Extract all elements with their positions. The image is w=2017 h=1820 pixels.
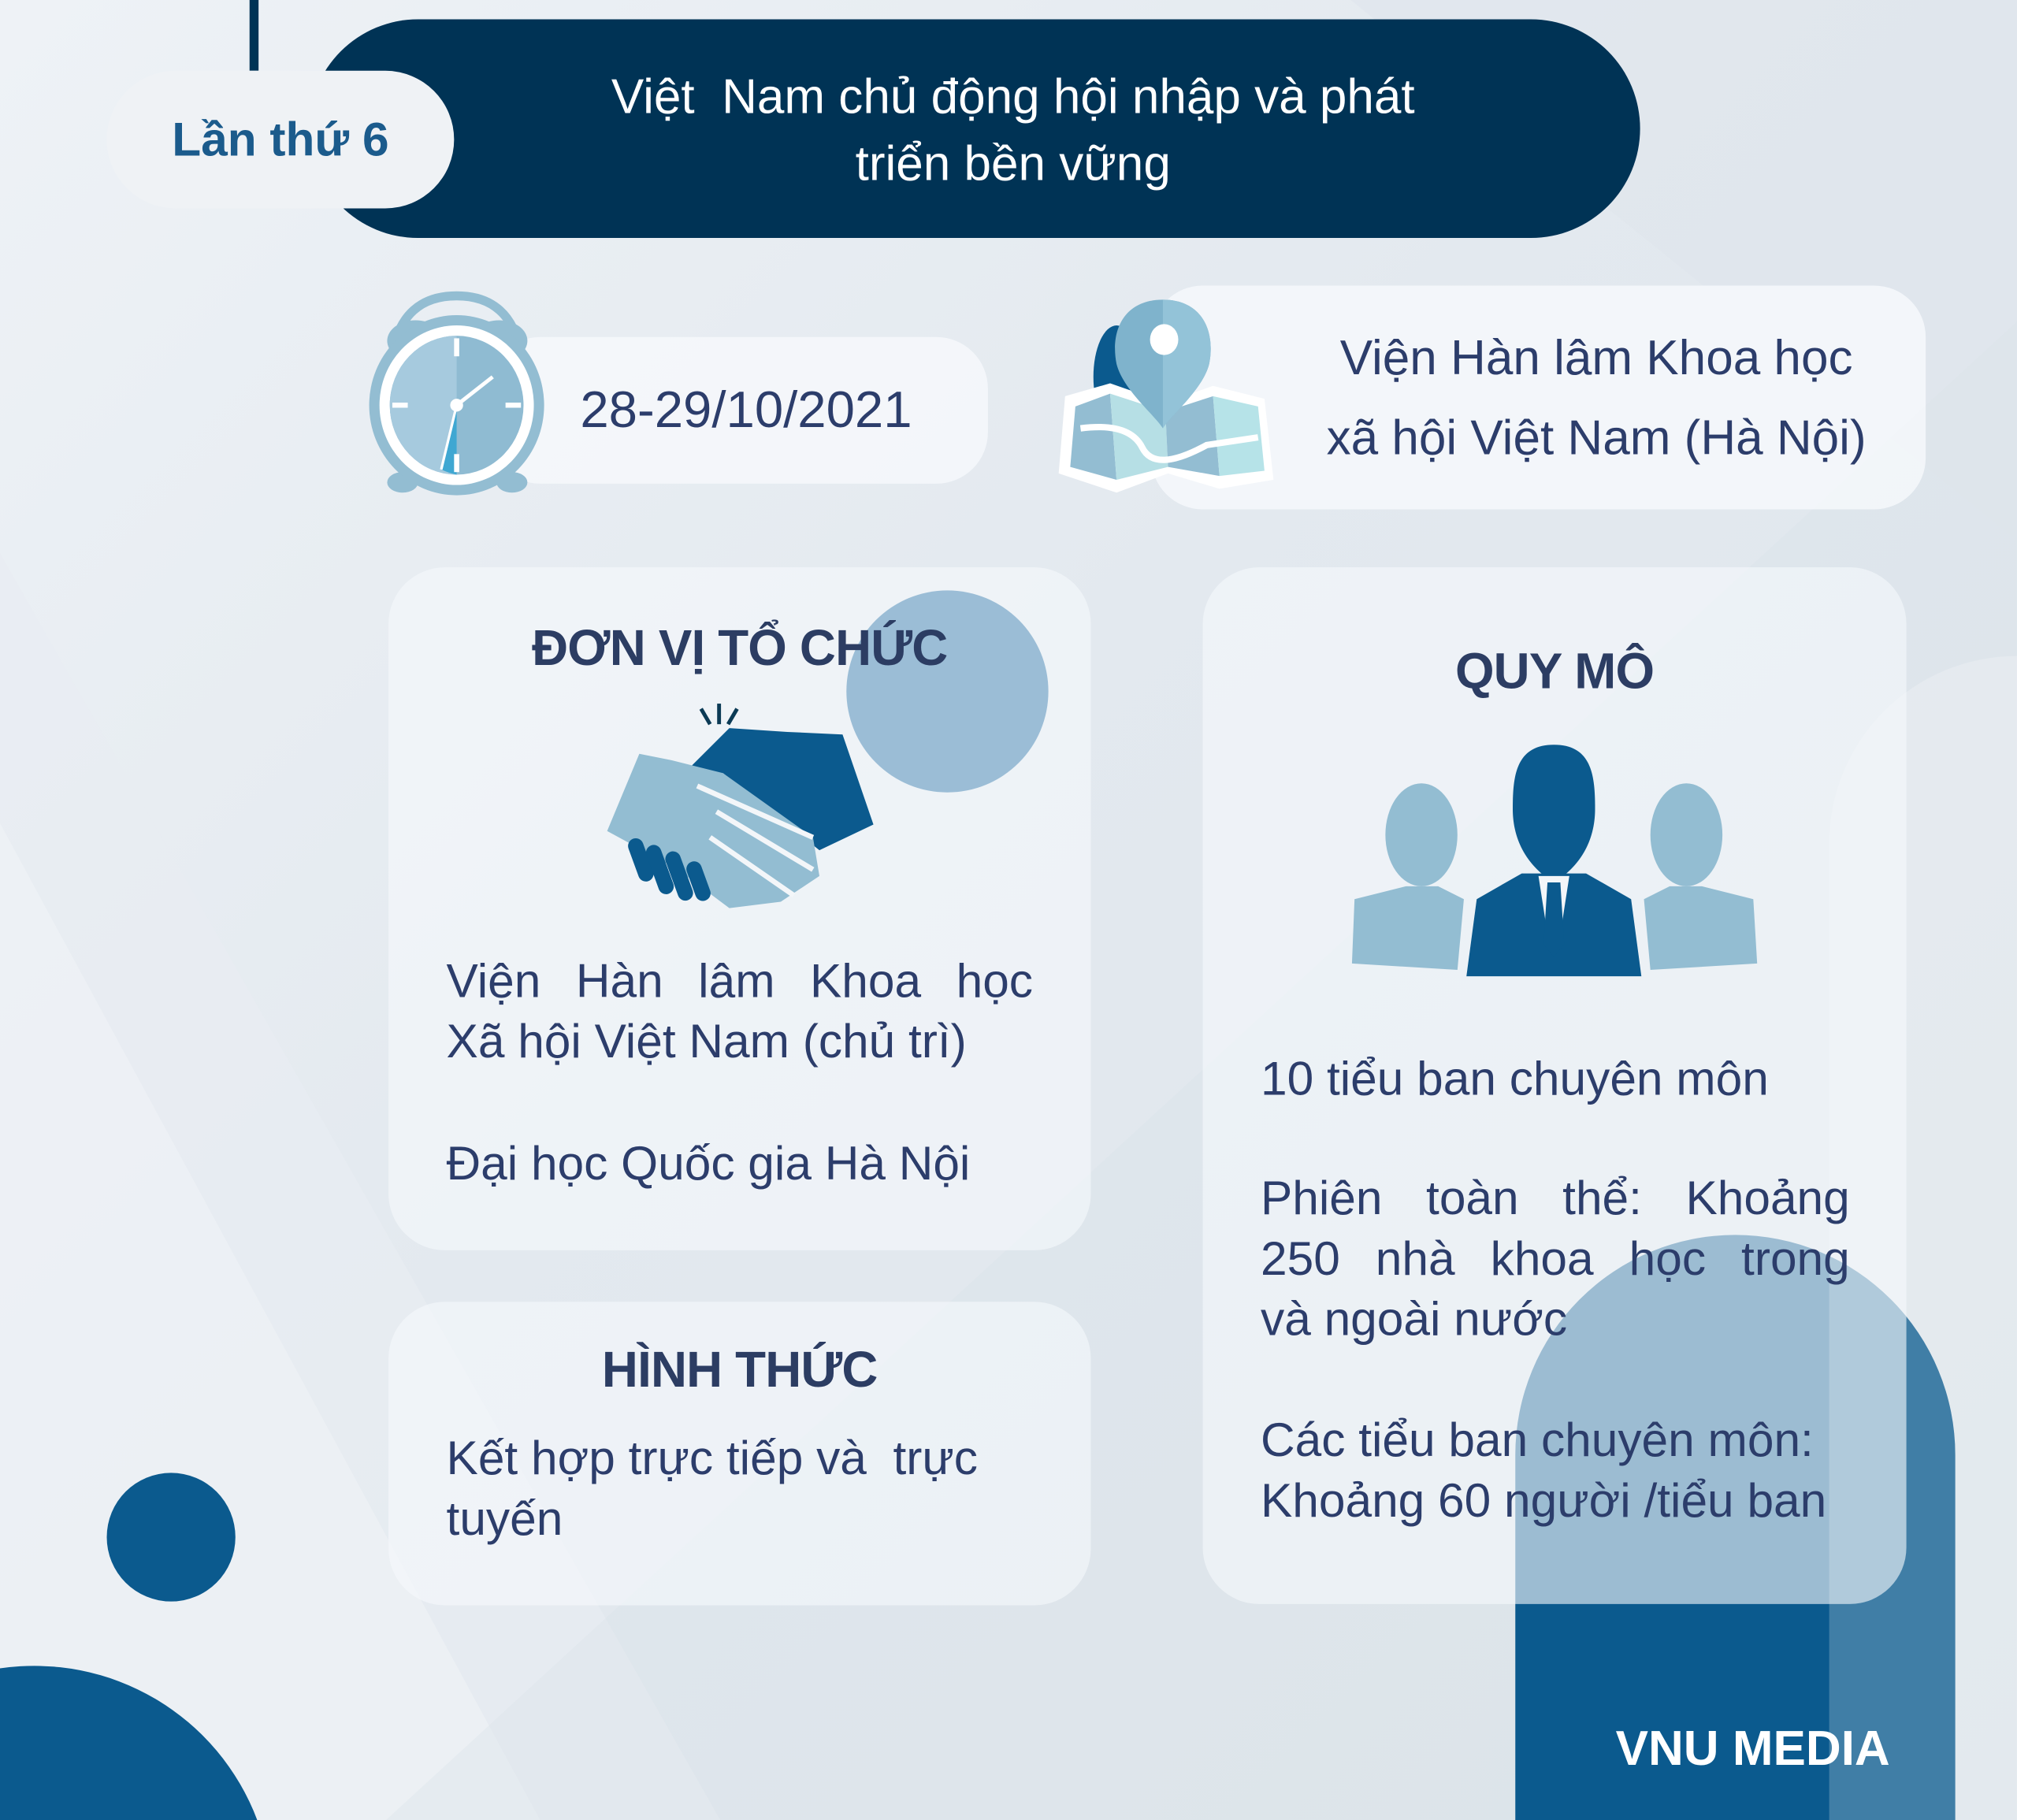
text: phiên toàn thể: và ngoài nước xyxy=(1261,1293,1567,1346)
date pill xyxy=(488,337,988,484)
heading: ĐƠN VỊ TỔ CHỨC xyxy=(532,622,947,677)
location pill: xã hội Việt Nam (Hà Nội) xyxy=(1327,411,1867,466)
footer: VNU MEDIA: VNU MEDIA xyxy=(1616,1722,1890,1777)
icon: clock xyxy=(369,292,544,496)
title banner xyxy=(309,19,1640,238)
icon: map pin xyxy=(1059,299,1273,493)
icon: handshake xyxy=(607,704,873,908)
decorative quarter circle bottom-left xyxy=(0,1666,257,1820)
heading: HÌNH THỨC xyxy=(602,1343,878,1398)
text: các tiểu ban xyxy=(1261,1413,1826,1527)
text: organizers xyxy=(446,954,1033,1068)
panel: hình thức xyxy=(388,1302,1090,1606)
text: các tiểu ban: Các tiểu ban chuyên môn: xyxy=(1261,1413,1814,1466)
text: phiên toàn thể: Phiên toàn thể: Khoảng xyxy=(1261,1172,1850,1224)
text: tuyến xyxy=(447,1492,563,1545)
badge: lần thứ 6: Lần thứ 6 xyxy=(172,113,389,166)
text: organizers: Xã hội Việt Nam (chủ trì) xyxy=(447,1015,967,1068)
text: phiên toàn thể xyxy=(1261,1172,1850,1346)
date pill: 28-29/10/2021 xyxy=(580,382,912,439)
text xyxy=(447,1432,978,1545)
panel: quy mô xyxy=(1203,567,1907,1604)
text: Kết hợp trực tiếp và trực xyxy=(447,1432,978,1484)
text: organizers: Viện Hàn lâm Khoa học xyxy=(447,954,1033,1007)
decorative circle bottom-left xyxy=(107,1473,236,1602)
text: VNU: Đại học Quốc gia Hà Nội xyxy=(447,1137,970,1190)
text: phiên toàn thể: 250 nhà khoa học trong xyxy=(1261,1232,1850,1285)
decorative circle xyxy=(846,590,1049,793)
panel: đơn vị tổ chức xyxy=(388,567,1090,1250)
location pill xyxy=(1151,285,1926,510)
text: các tiểu ban: Khoảng 60 người /tiểu ban xyxy=(1261,1474,1826,1527)
location pill: Viện Hàn lâm Khoa học xyxy=(1340,332,1852,386)
text: 10 tiểu ban: 10 tiểu ban chuyên môn xyxy=(1261,1053,1769,1105)
icon: people xyxy=(1352,745,1757,977)
vertical line xyxy=(250,0,258,71)
decorative arch right xyxy=(1515,1235,1956,1820)
title banner: Việt Nam chủ động hội nhập và phát xyxy=(611,71,1415,124)
heading: QUY MÔ xyxy=(1455,644,1654,700)
badge: lần thứ 6 xyxy=(107,71,454,208)
title banner: triển bền vững xyxy=(856,138,1171,191)
decorative big light arch xyxy=(1829,656,2017,1820)
